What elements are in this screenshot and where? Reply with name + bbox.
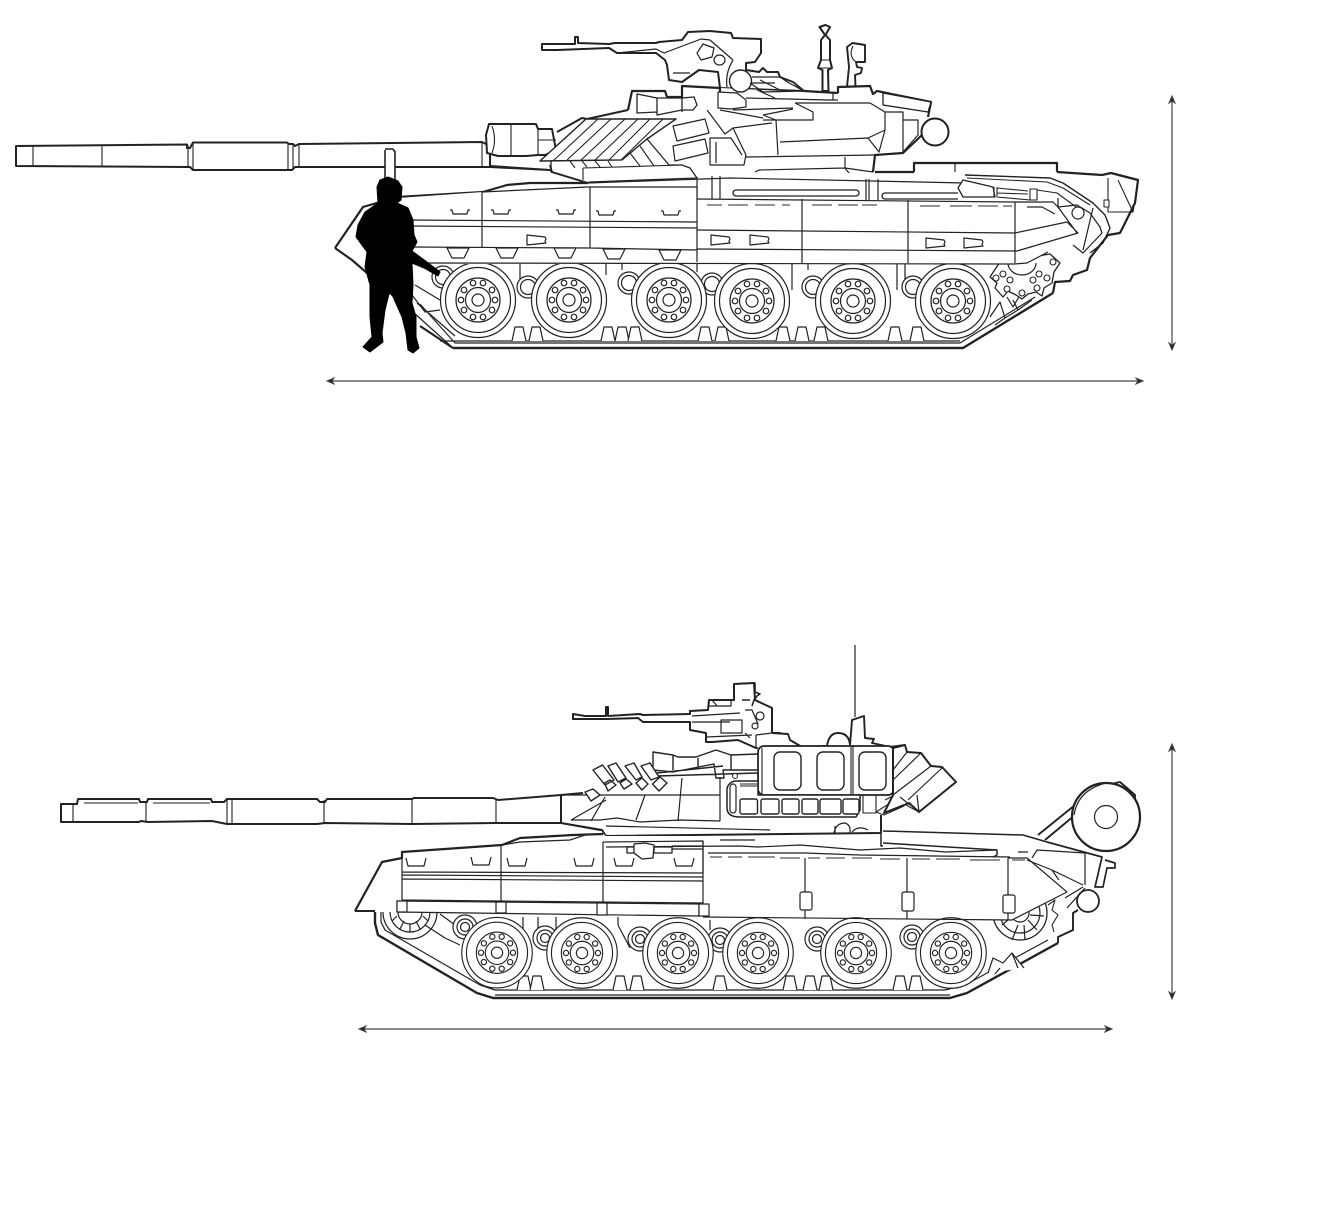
- dimension arrow: top tank height: [1169, 96, 1175, 350]
- bottom tank: hull: [355, 831, 1118, 998]
- bottom tank: antenna: [854, 645, 856, 717]
- bottom tank: side elevation: [61, 645, 1140, 998]
- top tank: gun barrel: [16, 124, 556, 170]
- top tank: antenna mast and sight: [818, 25, 865, 91]
- top tank: side elevation with soldier: [16, 25, 1138, 353]
- bottom tank: rear drum and bracket: [1038, 782, 1140, 851]
- top tank: heavy machine gun and mount: [542, 31, 804, 91]
- bottom tank: rear turret basket: [884, 745, 956, 813]
- bottom tank: track and running gear: [375, 886, 1058, 998]
- top tank: travel lock post: [385, 149, 395, 182]
- bottom tank: machine gun and commander cupola: [573, 683, 780, 748]
- top tank: hatched turret armour: [505, 119, 697, 187]
- bottom tank: side skirts: [397, 841, 1067, 920]
- top tank: turret body: [540, 70, 948, 182]
- top tank: side skirts: [398, 187, 1078, 264]
- dimension arrow: top tank length: [327, 378, 1143, 384]
- top tank: track and running gear: [412, 254, 1060, 348]
- soldier silhouette with rifle: [356, 177, 440, 353]
- top tank: hull upper deck: [335, 163, 1138, 348]
- dimension arrow: bottom tank height: [1169, 744, 1175, 999]
- bottom tank: gun barrel: [61, 795, 600, 830]
- bottom tank: turret body: [561, 716, 905, 836]
- bottom tank: fume extractor clamp detail: [627, 843, 703, 859]
- dimension arrow: bottom tank length: [359, 1026, 1112, 1032]
